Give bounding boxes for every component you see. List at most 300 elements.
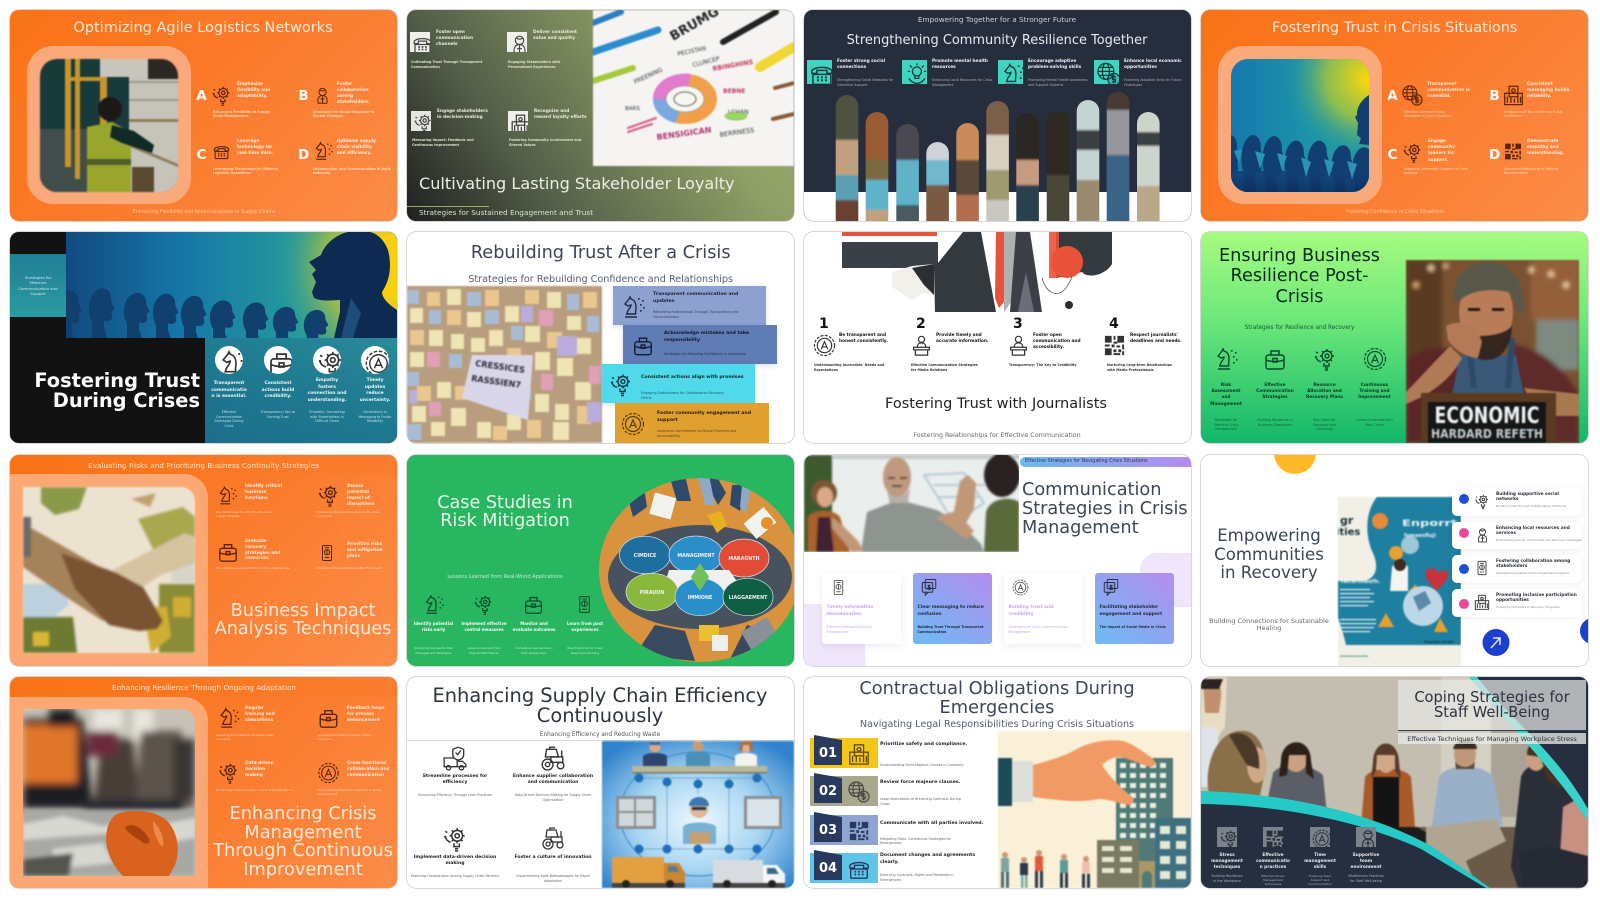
point: responsibility — [664, 338, 700, 343]
point: Consistent actions align with promises — [641, 375, 744, 380]
point: opportunities — [1124, 65, 1157, 70]
detail — [317, 734, 371, 742]
point: deadlines and needs. — [1130, 339, 1182, 344]
detail: Data-Driven Decision-Making for Supply Chain — [515, 793, 591, 797]
point — [1351, 853, 1381, 871]
detail: with Stakeholders in — [310, 415, 344, 419]
photo: marker drawing: BERRNESS — [719, 126, 755, 139]
title — [215, 602, 391, 639]
point: skills — [1314, 865, 1326, 870]
point: empathy and — [1527, 145, 1559, 150]
point: engagement and support — [1100, 612, 1162, 617]
point — [1358, 383, 1391, 402]
tag text: Strategies for — [25, 275, 51, 280]
detail: Strengthening Networks for Sustainable Support — [1496, 571, 1569, 575]
column 3 — [302, 338, 350, 443]
point: Consistent — [264, 381, 292, 386]
detail — [1107, 363, 1172, 374]
tag — [1020, 457, 1191, 467]
item 1 — [409, 743, 505, 801]
detail: Mitigating Risks: Contractual Strategies for — [880, 837, 951, 841]
point — [347, 484, 374, 508]
poster image: Twcertheefh. — [1340, 579, 1380, 585]
point: control measures — [464, 627, 504, 632]
point — [837, 58, 885, 70]
detail — [358, 410, 392, 424]
title: Improvement — [243, 859, 363, 880]
detail — [1028, 78, 1088, 87]
detail: Emergencies — [880, 878, 901, 882]
point: Data-driven — [245, 761, 274, 766]
detail: Strategies for — [1215, 418, 1237, 422]
numbered tab: 01 — [819, 746, 837, 761]
arrow button — [1482, 629, 1510, 656]
bullet — [1459, 494, 1469, 504]
detail: Building Resilience — [1211, 874, 1243, 878]
detail: Cultivating Trust Through Transparent — [411, 60, 482, 64]
kicker: Evaluating Risks and Prioritizing Business Continuity Strategies — [88, 461, 319, 470]
point: Be transparent and — [839, 333, 886, 338]
detail — [1124, 78, 1182, 87]
detail — [516, 874, 590, 883]
letter D: D — [298, 147, 309, 163]
icon: building — [1474, 593, 1490, 611]
icon: phone — [214, 146, 230, 160]
point: functions — [245, 496, 268, 501]
photo: sticky notes wall: CRESSICES — [475, 359, 525, 376]
detail: Fostering Community Involvement and — [509, 138, 581, 142]
point: Cross-functional — [347, 761, 387, 766]
photo: marker drawing: BENSIGICAN — [656, 125, 712, 142]
title: Fostering Trust in Crisis Situations — [1272, 20, 1517, 36]
detail: High-Profile Failures — [469, 651, 499, 655]
point: Building trust and — [1008, 605, 1053, 610]
item A — [1387, 80, 1485, 118]
item 4 — [317, 538, 395, 573]
point: training and — [245, 712, 275, 717]
detail: Continuous Improvement — [412, 143, 459, 147]
detail — [880, 837, 951, 846]
point — [826, 605, 873, 618]
point: for process — [347, 712, 374, 717]
point — [664, 330, 749, 344]
point: team — [1360, 859, 1372, 864]
detail: Engaging Stakeholders for Collaborative Recovery — [641, 391, 724, 395]
point: management — [1211, 859, 1243, 864]
point — [336, 138, 376, 156]
point: environment — [1351, 865, 1381, 870]
photo: table with diagram: MANAGIMENT — [677, 553, 715, 559]
card 8: Ensuring Business Resilience Post-Crisis — [1201, 232, 1588, 443]
icon: gear — [1362, 347, 1386, 371]
point: and mitigation — [347, 548, 383, 553]
list item 3 — [1452, 555, 1582, 583]
title: During Crises — [53, 389, 200, 412]
title: Emergencies — [940, 696, 1054, 718]
point: communicatio — [211, 388, 247, 392]
detail: Enhancing Communication During Crisis Situations — [216, 788, 292, 792]
point — [1210, 383, 1242, 408]
detail: Response Planning — [571, 651, 599, 655]
detail: Adaptation — [544, 879, 562, 883]
icon: briefcase — [217, 541, 239, 563]
detail: Best Practices for Crisis — [567, 646, 603, 650]
point — [534, 108, 587, 120]
bullet — [1459, 528, 1469, 538]
point: fosters — [318, 384, 336, 390]
point — [932, 58, 988, 70]
point — [567, 621, 603, 633]
detail: Innovative Approaches in — [515, 646, 553, 650]
column 2 — [1251, 827, 1295, 885]
point: communication is — [1427, 88, 1470, 93]
numbered tab: 02 — [819, 784, 837, 799]
point: technology for — [237, 145, 272, 150]
detail: Building Trust Through Transparent — [918, 625, 984, 629]
point — [245, 484, 282, 502]
point: understanding. — [308, 398, 346, 402]
point — [1527, 82, 1569, 100]
numbered tab — [810, 735, 880, 769]
detail: Learning from Past Crises for Future — [317, 733, 371, 737]
point — [237, 138, 273, 156]
icon box — [998, 60, 1023, 84]
point — [513, 621, 555, 633]
point: enhancement — [347, 718, 380, 723]
title: Crisis — [1276, 287, 1323, 307]
point 4 — [1103, 317, 1191, 375]
poster image: gr — [1340, 514, 1354, 527]
title: Optimizing Agile Logistics Networks — [73, 20, 333, 36]
subtitle box — [1398, 733, 1586, 744]
point: Timely information — [826, 605, 873, 610]
icon: briefcase — [1263, 347, 1287, 371]
point: risks early — [422, 627, 445, 632]
detail: Communication — [216, 415, 242, 419]
column 1 — [1205, 827, 1249, 885]
detail: Support and — [1311, 878, 1329, 882]
point: Building supportive social — [1496, 492, 1559, 496]
numbered tab: 04 — [819, 861, 837, 876]
detail — [468, 646, 500, 655]
point — [1306, 383, 1343, 402]
detail: Implementing Feedback Loops for Ongoing — [317, 788, 382, 792]
icon box — [507, 32, 527, 52]
photo: marker drawing: BEBNE — [723, 88, 745, 95]
detail: Consistency in — [363, 410, 387, 414]
number: 1 — [819, 316, 829, 332]
point — [414, 621, 453, 633]
point — [1527, 139, 1564, 158]
detail — [317, 511, 379, 519]
point: impact of — [347, 496, 370, 501]
card 3: Strengthening Community Resilience Together — [804, 10, 1191, 221]
title: Analysis Techniques — [215, 619, 391, 639]
poster image: fomaenfluji — [1404, 533, 1436, 539]
letter D: D — [1489, 147, 1500, 163]
detail: Market Changes — [313, 114, 343, 118]
point: Foster open — [1033, 333, 1062, 338]
detail — [212, 110, 270, 118]
point — [880, 853, 975, 866]
detail — [1504, 110, 1562, 118]
detail: Long-term Commitment to Ethical Practices and — [657, 429, 736, 433]
photo: table with diagram: PIRAUON — [640, 590, 664, 596]
detail: Misinformation — [1504, 171, 1528, 175]
point: resources — [245, 556, 269, 561]
detail: Mindfulness Practices — [1348, 874, 1384, 878]
detail: Analyzing Successful Risk — [414, 646, 453, 650]
point: honest consistently. — [839, 339, 888, 344]
detail: Strategies for Rapid Response to — [313, 110, 374, 114]
card 1: Optimizing Agile Logistics Networks — [10, 10, 397, 221]
photo: thoughtful man with sign: HARDARD REFETH — [1431, 427, 1543, 441]
point: Strategies — [1262, 395, 1288, 400]
title — [34, 371, 200, 411]
point: techniques — [1214, 865, 1240, 870]
tag text: Effective Strategies for Navigating Crisis Situations — [1025, 459, 1148, 464]
subtitle: Effective Techniques for Managing Workplace Stress — [1407, 734, 1577, 742]
list item 4 — [1452, 589, 1582, 617]
card 13: Enhancing Crisis Management Through Continuous Improvement — [10, 677, 397, 888]
title: Case Studies in — [437, 493, 573, 513]
strategy box 4 — [615, 403, 769, 443]
point — [1427, 82, 1470, 100]
detail — [1008, 625, 1068, 635]
number: 3 — [1013, 316, 1023, 332]
detail: Strategies in Crisis Situations — [1404, 114, 1452, 118]
point: strategies and — [245, 551, 280, 556]
icon: knight — [316, 142, 333, 160]
list item 2 — [1452, 522, 1582, 549]
detail — [508, 60, 560, 69]
top band — [10, 677, 397, 697]
point: Encourage adaptive — [1028, 59, 1076, 64]
detail: Personalized Experiences — [508, 65, 555, 69]
point: real-time data. — [237, 151, 273, 156]
point — [1008, 605, 1053, 618]
title — [1022, 481, 1188, 537]
item 1 — [410, 30, 482, 69]
point: Enhancing local resources and — [1496, 526, 1570, 530]
point — [1124, 59, 1182, 71]
column 3 — [509, 593, 559, 659]
point — [1211, 853, 1243, 871]
detail: Lessons Learned from — [1356, 418, 1393, 422]
detail: Collective Support — [837, 83, 867, 87]
detail — [880, 873, 954, 883]
detail: for Media Relations — [911, 368, 947, 372]
detail: Crisis — [225, 424, 233, 428]
image frame — [1218, 46, 1382, 204]
photo: marker drawing: RBINGHINS — [712, 58, 754, 73]
card 9: Business Impact Analysis Techniques — [10, 455, 397, 666]
icon box — [1217, 827, 1237, 847]
point: Assess — [347, 484, 363, 489]
image frame — [27, 46, 191, 204]
detail: Rebuilding Relationships Through Transparency and — [653, 310, 738, 314]
column 4 — [1350, 345, 1398, 437]
photo: marker drawing: PECISTAN — [677, 45, 707, 58]
point: Promoting inclusive participation — [1496, 592, 1577, 598]
icon: podium — [1008, 334, 1029, 357]
detail: Management Strategies — [415, 651, 452, 655]
detail: Networks — [313, 171, 330, 175]
detail — [837, 78, 894, 87]
tag text: Effective — [30, 280, 46, 285]
detail: Measuring Impact: Feedback and — [412, 138, 474, 142]
icon: messages — [920, 578, 938, 596]
card 16: Coping Strategies for Staff Well-Being — [1201, 677, 1588, 888]
point — [211, 381, 247, 400]
detail: Communication — [918, 630, 946, 634]
point: Foster open — [436, 30, 465, 35]
point — [653, 291, 738, 305]
poster image: Sciennloecherkire — [1340, 654, 1368, 658]
card 10: Case Studies in Risk Mitigation — [407, 455, 794, 666]
white base strip — [804, 192, 1191, 221]
icon: brain gear — [1312, 347, 1336, 371]
detail: Communication — [1308, 882, 1332, 886]
photo: marker drawing: PREENING — [633, 66, 664, 86]
item 4 — [508, 108, 587, 147]
numbered tab — [810, 812, 880, 846]
footer: Enhancing Flexibility and Responsiveness in Supply Chains — [133, 209, 275, 215]
point — [657, 410, 751, 424]
icon box — [508, 111, 528, 131]
point: Identify potential — [414, 621, 453, 626]
title: Staff Well-Being — [1434, 704, 1550, 721]
subtitle: Building Connections for Sustainable — [1209, 617, 1329, 625]
detail: Strengthening Social Networks for — [837, 78, 893, 82]
item C — [1387, 137, 1485, 175]
point — [245, 539, 280, 562]
detail — [1257, 418, 1293, 427]
strategy box 3 — [602, 364, 755, 403]
detail: Strategies During — [215, 419, 243, 423]
card 6: Rebuilding Trust After a Crisis — [407, 232, 794, 443]
point — [1130, 333, 1182, 345]
photo: table with diagram: CIMDICE — [634, 553, 656, 559]
tag panel — [10, 254, 66, 317]
point: connections — [837, 65, 866, 70]
point: Consistent — [1527, 82, 1553, 87]
point: potential — [347, 490, 369, 495]
detail — [814, 363, 884, 374]
point: evaluate outcomes — [513, 627, 555, 632]
detail: Logistics Operations — [213, 171, 251, 175]
point: stakeholders. — [337, 100, 370, 105]
point: Foster community engagement and — [657, 411, 751, 416]
point: essential. — [1427, 94, 1451, 99]
icon: gear — [813, 334, 836, 357]
icon: podium — [911, 334, 932, 357]
point: Enhance supplier collaboration — [513, 774, 593, 779]
item C — [197, 138, 278, 175]
point: Respect journalists' — [1130, 333, 1178, 338]
card 5: Fostering Trust During Crises — [10, 232, 397, 443]
point: making — [245, 773, 263, 778]
detail — [1404, 110, 1452, 118]
point: Feedback loops — [347, 706, 385, 711]
point — [1256, 853, 1290, 871]
photo: table with diagram — [599, 478, 794, 662]
point: Prioritize risks — [347, 542, 382, 547]
point: Timely — [367, 378, 383, 383]
detail: Understanding Force Majeure Clauses in Contracts — [880, 763, 963, 767]
point — [513, 774, 593, 786]
icon: bust — [317, 88, 328, 104]
column 2 — [254, 338, 302, 443]
letter A: A — [196, 88, 207, 104]
photo: sticky notes wall — [407, 286, 602, 443]
detail: Reliability — [367, 419, 383, 423]
title: Empowering — [1217, 526, 1321, 545]
point — [347, 542, 383, 560]
detail: Communication — [411, 65, 440, 69]
card 14: Enhancing Supply Chain Efficiency Continuously — [407, 677, 794, 888]
detail: Transparency: Key to Gaining Public — [1504, 110, 1562, 114]
point — [1428, 139, 1455, 164]
item 3 — [998, 58, 1088, 87]
subtitle: Strategies for Resilience and Recovery — [1245, 325, 1354, 331]
detail: Understanding Journalists' Needs and — [814, 363, 884, 367]
point — [423, 774, 487, 786]
item 4 — [317, 761, 395, 796]
point: Engage stakeholders — [437, 109, 488, 114]
point — [237, 82, 270, 99]
item 4 — [1094, 58, 1182, 87]
detail — [1308, 874, 1332, 887]
point: Identify critical — [245, 484, 282, 489]
title — [213, 805, 393, 879]
point: support — [657, 418, 678, 423]
detail: Effective Communication Strategies — [911, 363, 978, 367]
number: 4 — [1109, 316, 1119, 332]
item B — [298, 82, 374, 118]
subtitle: Strategies for Rebuilding Confidence and Relationships — [468, 274, 733, 285]
point — [839, 333, 888, 345]
photo strips: volunteers — [836, 92, 1160, 221]
point: dissemination — [826, 612, 861, 617]
detail: with Media Professionals — [1107, 368, 1154, 372]
point: Engage — [1428, 139, 1446, 144]
detail: Promoting Mental Health Awareness — [1028, 78, 1088, 82]
detail: Confidence — [1504, 114, 1522, 118]
detail — [213, 167, 278, 175]
column 1 — [204, 338, 252, 443]
icon: brain gear — [442, 826, 468, 852]
title: Management — [244, 822, 362, 843]
point: accurate information. — [936, 339, 989, 344]
curved navy band with teal edge — [1201, 677, 1588, 888]
point: plans — [347, 554, 360, 559]
icon: brain gear — [1474, 493, 1490, 510]
column 4 — [350, 338, 396, 443]
point: Stress — [1219, 853, 1235, 858]
point — [245, 706, 275, 724]
column 4 — [1344, 827, 1388, 885]
title — [1214, 527, 1324, 583]
point: Document changes and agreements — [880, 853, 975, 858]
title: Enhancing Crisis — [230, 803, 376, 824]
point — [1028, 58, 1081, 70]
item D — [298, 138, 391, 175]
point: Effective — [1262, 853, 1284, 858]
lilac blob left — [804, 604, 865, 666]
icon circle — [264, 346, 292, 374]
point — [437, 108, 488, 120]
